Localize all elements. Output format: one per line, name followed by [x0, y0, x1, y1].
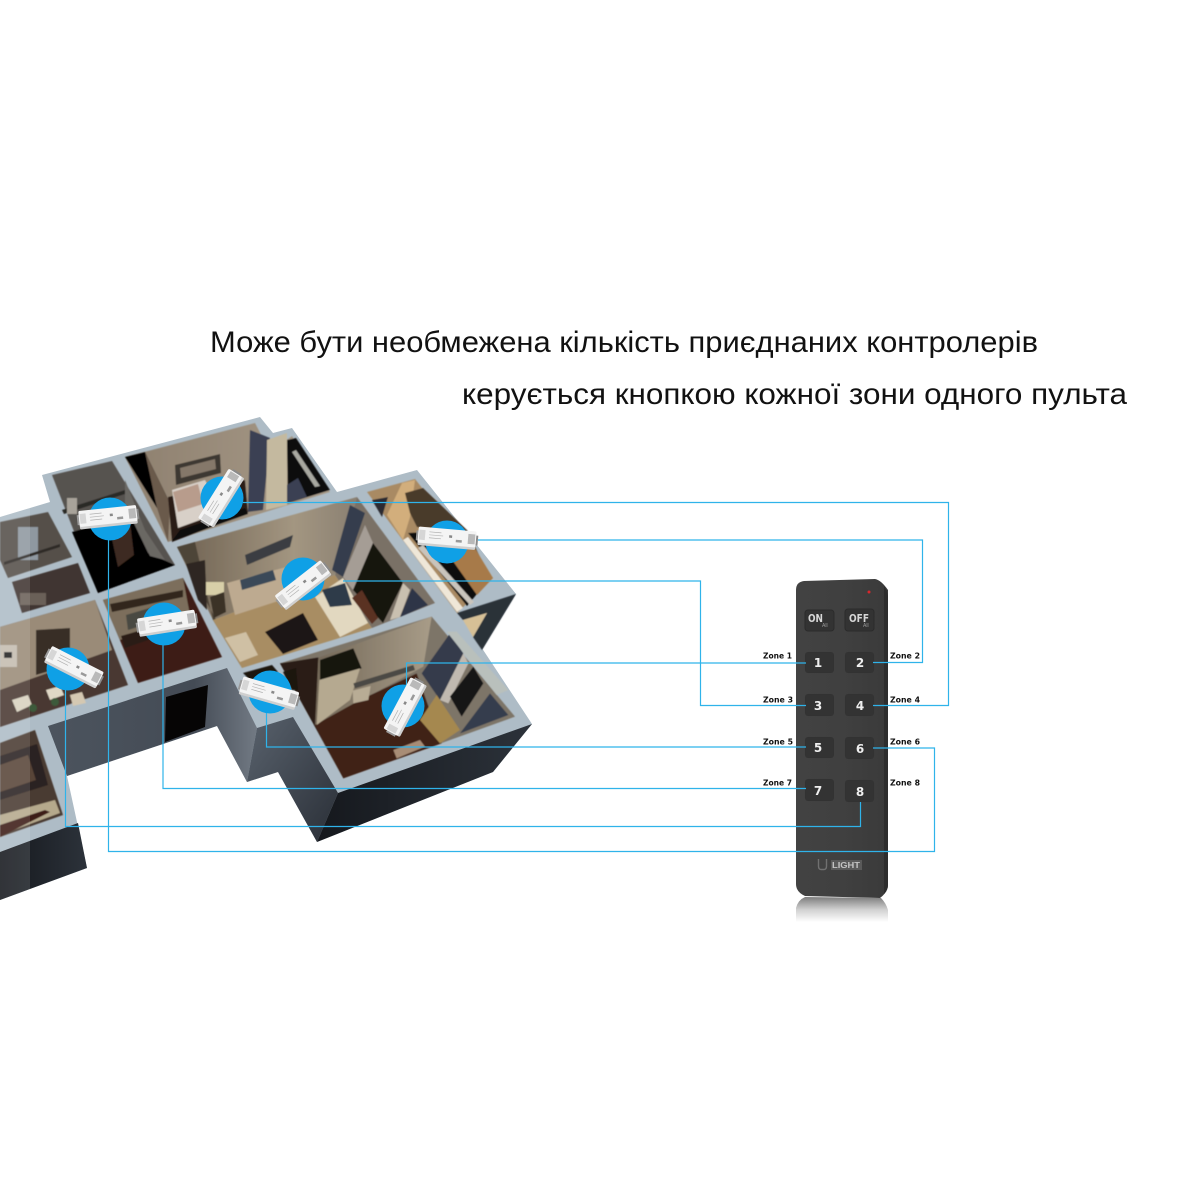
line: zone 8: [66, 688, 860, 826]
zone labels: Zone 3: [763, 696, 793, 704]
zone labels: Zone 6: [890, 738, 920, 746]
button: OFF: [845, 609, 874, 631]
title text: [210, 326, 1127, 411]
room: lower-left grey room with door: [48, 668, 257, 782]
room: living room: [177, 497, 435, 668]
line: zone 1: [406, 663, 806, 685]
logo: [818, 859, 862, 870]
controller: room 7: [135, 602, 199, 646]
zone labels: Zone 8: [890, 778, 920, 788]
button: ON: [805, 610, 834, 631]
controller: dining: [42, 645, 106, 690]
room: balcony: [367, 479, 493, 613]
line: zone 7: [163, 640, 806, 788]
room: top-left bathroom: [52, 461, 175, 593]
buttons: numbered: [805, 652, 874, 802]
room: left bath upper: [0, 512, 72, 578]
button: ON: All: [822, 623, 828, 629]
buttons: numbered: 8: [856, 785, 864, 799]
zone labels: Zone 1: [763, 652, 792, 660]
button: OFF: All: [863, 623, 869, 629]
zone labels: [763, 652, 920, 788]
remote body: [796, 579, 888, 898]
door: [165, 685, 208, 742]
room: dining: [0, 600, 128, 727]
zone labels: Zone 4: [890, 696, 920, 704]
line: zone 2: [478, 540, 922, 662]
title text: керується кнопкою кожної зони одного пульта: [462, 378, 1127, 411]
room: wood floor room 7: [103, 578, 222, 683]
controller: bedroom: [197, 467, 245, 529]
connection lines: [66, 502, 948, 852]
controller: lower bedroom: [382, 675, 428, 739]
controller: hall: [237, 670, 301, 714]
button: ON: ON: [808, 613, 823, 625]
buttons: numbered: 2: [856, 656, 864, 670]
buttons: numbered: 1: [814, 656, 822, 670]
controller: living room: [273, 558, 333, 612]
exterior dark sides: [0, 717, 532, 900]
buttons: numbered: 7: [814, 784, 822, 798]
left translucent fade: [0, 500, 30, 900]
room: top bedroom: [125, 423, 330, 542]
buttons: numbered: 5: [814, 741, 822, 755]
controller: bathroom: [76, 498, 140, 540]
remote control: [796, 579, 888, 922]
room: hall: [243, 665, 298, 690]
room: left bath lower: [12, 563, 90, 613]
controllers: [42, 467, 479, 739]
floor plan: [0, 417, 532, 900]
zone labels: Zone 2: [890, 652, 920, 660]
zone labels: Zone 7: [763, 778, 792, 788]
line: zone 3: [343, 581, 806, 706]
buttons: numbered: 6: [856, 742, 864, 756]
rooms: [0, 423, 516, 837]
line: zone 4: [243, 502, 948, 706]
building wall tops: [0, 417, 532, 900]
logo: LIGHT: [832, 861, 860, 870]
buttons: numbered: 3: [814, 699, 822, 713]
line: zone 6: [108, 540, 934, 852]
controller: balcony: [415, 520, 479, 564]
room: lower bedroom: [280, 617, 515, 778]
button: OFF: OFF: [849, 613, 869, 625]
room: balcony outer side: [457, 594, 516, 650]
remote reflection: [796, 897, 888, 922]
zone labels: Zone 5: [763, 738, 793, 746]
buttons: numbered: 4: [856, 699, 864, 713]
title text: Може бути необмежена кількість приєднаних контролерів: [210, 326, 1038, 359]
room: bottom-left: [0, 730, 63, 837]
line: zone 5: [266, 710, 806, 747]
